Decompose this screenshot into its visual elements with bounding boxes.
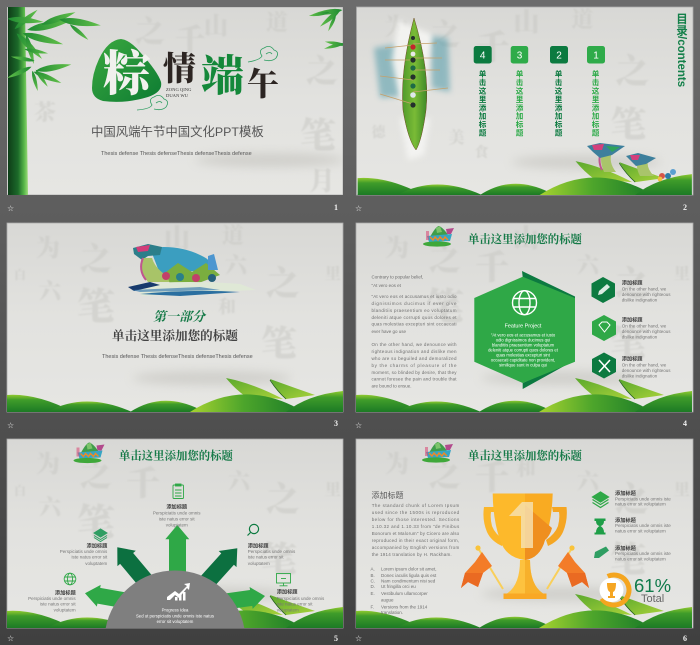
- slide 4 footer: ☆: [355, 421, 362, 430]
- slide 5 footer: 5: [334, 634, 338, 643]
- logo: 情端午 lettering: [163, 51, 279, 102]
- lettered list: [370, 566, 437, 615]
- text heading: 添加标题: [372, 490, 404, 500]
- contents item 3: 单击这里添加标题: [515, 69, 524, 137]
- slide 5: progress idea: 笔: [77, 492, 115, 547]
- slide 5: progress idea: 笔: [261, 532, 297, 583]
- left flag: [461, 545, 503, 589]
- slide 2: contents: 德: [372, 122, 388, 142]
- slide 5: progress idea: 为: [36, 444, 60, 479]
- slide 3: section title: 道: [222, 219, 244, 250]
- central semicircle: Progress Idea: [162, 608, 189, 612]
- intro text column: Contrary to popular belief,: [372, 274, 423, 280]
- slide 3: section title: 山: [164, 218, 190, 255]
- intro text column: "At vero eos et: [372, 283, 402, 288]
- slide 6 heading: 单击这里添加您的标题: [468, 448, 583, 462]
- info item: layers: natus error sit voluptatem: [615, 502, 666, 506]
- contents item 4: 4: [480, 50, 486, 62]
- paragraph: accompanied by English versions from: [372, 545, 459, 550]
- contents item 1: [587, 46, 605, 137]
- feature 2: denounce with righteous: [622, 329, 671, 334]
- slide 2: contents: 笔: [610, 97, 647, 148]
- section label: 第一部分: [153, 309, 207, 324]
- slide 3: section title: 为: [36, 228, 60, 263]
- icon: layers: [94, 529, 107, 542]
- slide 1: cover: [6, 6, 346, 198]
- intro text column: On the other hand, we denounce with: [372, 342, 457, 347]
- intro text column: by the charms of pleasure of the: [372, 363, 457, 368]
- feature 3: On the other hand, we: [622, 362, 667, 368]
- item: upper right: 添加标题: [248, 542, 269, 550]
- trophy: [483, 494, 567, 599]
- item: upper left: iste natus error sit: [72, 554, 108, 560]
- slide 3: section title: 笔: [261, 316, 297, 367]
- slide 2 footer: ☆: [355, 204, 362, 213]
- paragraph: [372, 503, 460, 557]
- slide 6: trophy: 里: [674, 477, 690, 500]
- slide 1: cover: 之: [135, 7, 165, 51]
- feature 1: 添加标题: [622, 278, 643, 286]
- logo: 情端午 lettering: 午: [247, 66, 279, 102]
- slide 2: contents: 道: [571, 3, 594, 34]
- central hexagon: [474, 271, 575, 389]
- slide 4 footer: [355, 419, 687, 430]
- central hexagon: "At vero eos et accusamus et iusto: [491, 332, 556, 338]
- lettered list: Lorem ipsum dolor sit amet,: [381, 566, 437, 572]
- slide 6: trophy: 笔: [610, 532, 646, 583]
- slide 4: feature project: 之: [615, 256, 649, 305]
- contents item 4: 单击这里添加标题: [478, 69, 487, 137]
- bottom leaves: [7, 378, 343, 412]
- slide 6: trophy: 为: [385, 444, 409, 479]
- slide 1 footer: 1: [334, 203, 338, 212]
- arrow: upper right: [198, 540, 246, 591]
- right flag: [547, 545, 589, 589]
- intro text column: are bound to ensue.: [372, 384, 412, 388]
- icon: monitor: [276, 574, 290, 586]
- bamboo leaves left: [6, 8, 101, 91]
- slide 2 footer: [355, 203, 687, 213]
- bottom leaves: [356, 594, 692, 628]
- slide 3: section title: [7, 218, 343, 412]
- feature 3: 添加标题: [622, 354, 643, 362]
- slide 3 footer: [7, 419, 338, 430]
- subtitle: Thesis defense Thesis defenseThesis defenseThesis defense: [101, 151, 252, 157]
- central hexagon: Feature Project: [505, 324, 542, 330]
- item: top: voluptatem: [166, 522, 188, 528]
- icon: globe: [64, 573, 76, 585]
- item: top: [153, 484, 201, 528]
- info item: pencil: [594, 544, 671, 562]
- total label: Total: [641, 593, 664, 605]
- logo badge: 粽: [92, 39, 161, 102]
- icon: layers: [592, 492, 608, 508]
- slide 5: progress idea: 六: [228, 465, 253, 496]
- slide 1 footer: [7, 203, 338, 213]
- icon: small trophy: [607, 583, 616, 598]
- slide 4: feature project: 之: [429, 234, 461, 280]
- item: right: iste natus error sit: [277, 602, 313, 606]
- info item: layers: [592, 489, 671, 508]
- lettered list: augue: [381, 598, 394, 602]
- item: upper left: 添加标题: [87, 542, 108, 550]
- lettered list: B.: [370, 573, 375, 578]
- slide 5: progress idea: 白: [14, 482, 26, 499]
- contents item 1: 1: [593, 50, 599, 62]
- item: upper right: voluptatem: [248, 561, 270, 566]
- feature 3: denounce with righteous: [622, 368, 671, 373]
- icon: diamond: [599, 322, 610, 332]
- intro text column: who are so beguiled and demoralized: [372, 356, 457, 361]
- slide 3: section title: 笔: [77, 276, 115, 331]
- header logo: [423, 226, 454, 247]
- slide 6: trophy: 六: [577, 465, 602, 496]
- arrow: right: [222, 585, 267, 613]
- info item: pencil: 添加标题: [615, 544, 637, 552]
- slide 2: contents: 美: [448, 125, 465, 148]
- logo: 情端午 lettering: DUAN WU: [166, 93, 189, 98]
- slide 3 footer: 3: [334, 419, 338, 428]
- slide 4: feature project: 笔: [426, 276, 464, 331]
- slide 6: trophy: 和: [516, 452, 536, 481]
- arrow: left: [83, 582, 128, 611]
- arrow: upper left: [108, 540, 156, 590]
- intro text column: cannot foresee the pain and trouble that: [372, 376, 457, 382]
- slide 5: progress idea: 之: [80, 450, 112, 496]
- contents item 1: 单击这里添加标题: [591, 69, 600, 137]
- header logo: [74, 442, 104, 463]
- contents item 3: 3: [517, 50, 523, 62]
- contents item 4: [474, 46, 492, 137]
- lettered list: Versions from the 1914: [381, 604, 428, 610]
- paragraph: The standard chunk of Lorem Ipsum: [372, 503, 459, 508]
- item: top: iste natus error sit: [159, 516, 195, 522]
- item: top: 添加标题: [166, 502, 188, 510]
- slide 1: cover: 茶: [34, 96, 56, 127]
- info item: hourglass: Perspiciatis unde omnis iste: [615, 523, 671, 528]
- feature 1: dislike indignation: [622, 298, 658, 302]
- intro text column: dignissimos ducimus if ever give: [372, 301, 457, 306]
- section title: 单击这里添加您的标题: [112, 328, 238, 343]
- paragraph: 1.10.32 and 1.10.33 from "de Finibus: [372, 524, 460, 529]
- donut chart: 61%: [594, 570, 634, 610]
- bamboo stem: [8, 7, 28, 195]
- lettered list: D.: [370, 584, 375, 589]
- slide 5: progress idea: 之: [266, 472, 300, 521]
- slide 6 footer: 6: [683, 634, 687, 643]
- info item: hourglass: 添加标题: [615, 516, 637, 524]
- item: right: 添加标题: [277, 588, 298, 596]
- icon: wrench: [248, 524, 259, 536]
- intro text column: moment, so blinded by desire, that they: [372, 370, 457, 375]
- slide 2: contents: 山: [513, 2, 540, 39]
- dragon heads: [587, 143, 676, 181]
- percent label: 61%: [634, 575, 671, 596]
- slide 3: section title: 白: [14, 266, 26, 283]
- slide 4: feature project: [356, 218, 693, 412]
- feature 1: [592, 277, 671, 303]
- slide 3: section title: 之: [80, 234, 112, 280]
- central hexagon: odio dignissimos ducimus qui: [496, 338, 550, 342]
- slide 5: progress idea: 六: [39, 491, 64, 522]
- slide 4 footer: 4: [683, 419, 687, 428]
- slide 1: cover: 道: [266, 6, 288, 37]
- section subtitle: Thesis defense Thesis defenseThesis defenseThesis defense: [102, 354, 253, 360]
- slide 4: feature project: 六: [577, 249, 602, 280]
- paragraph: Bonorum et Malorum" by Cicero are also: [372, 531, 460, 536]
- logo: 情端午 lettering: 端: [201, 53, 244, 101]
- slide 3: section title: 和: [218, 293, 236, 319]
- logo badge: 粽: 粽: [103, 48, 154, 101]
- contents item 2: [550, 46, 568, 137]
- item: upper right: Perspiciatis unde omnis: [248, 549, 296, 554]
- lettered list: F.: [370, 604, 374, 610]
- paragraph: reproduced in their exact original form,: [372, 538, 459, 543]
- slide 3: section title: 里: [325, 261, 341, 284]
- arrow: top: [165, 525, 189, 575]
- feature 2: [592, 315, 671, 341]
- central hexagon: blanditiis praesentium voluptatum: [492, 343, 555, 348]
- slide 6 footer: [355, 634, 687, 643]
- slide 4: feature project: 山: [513, 218, 539, 255]
- item: upper right: iste natus error sit: [248, 554, 284, 560]
- paragraph: below for those interested. Sections: [372, 517, 460, 522]
- feature 2: On the other hand, we: [622, 324, 667, 328]
- slide 2: contents: 之: [616, 44, 650, 93]
- slide 3 footer: ☆: [7, 421, 14, 430]
- lettered list: Vestibulum ullamcorper: [381, 591, 428, 596]
- icon: hourglass: [594, 518, 606, 534]
- lettered list: A.: [370, 566, 375, 572]
- icon: pencil: [598, 284, 610, 295]
- logo: 情端午 lettering: 情: [163, 51, 196, 88]
- info item: pencil: Perspiciatis unde omnis iste: [615, 551, 671, 556]
- info item: layers: Perspiciatis unde omnis iste: [615, 496, 671, 502]
- contents item 3: [511, 46, 528, 137]
- item: left: Perspiciatis unde omnis: [28, 596, 76, 601]
- slide 5 footer: ☆: [7, 634, 14, 643]
- lettered list: Donec iaculis ligula quis est: [381, 573, 437, 578]
- slide 3: section title: 六: [39, 275, 64, 306]
- icon: tools: [599, 360, 610, 372]
- slide 2: contents: 千: [476, 20, 510, 69]
- central semicircle: [106, 570, 244, 628]
- slide 1: cover: 之: [306, 46, 338, 92]
- slide 3: section title: 六: [225, 249, 250, 280]
- lettered list: C.: [370, 578, 375, 584]
- item: upper right: [248, 524, 296, 566]
- intro text column: righteous indignation and dislike men: [372, 349, 457, 354]
- slide 3: section title: 之: [266, 256, 300, 305]
- contents heading: 目录/contents: [675, 13, 688, 87]
- item: left: voluptatem: [54, 608, 76, 612]
- bamboo leaves right: [309, 8, 343, 49]
- slide 5: progress idea: 里: [325, 477, 341, 500]
- item: upper left: Perspiciatis unde omnis: [60, 549, 108, 554]
- slide 4: feature project: 千: [475, 240, 509, 289]
- slide 4: feature project: 笔: [610, 316, 646, 367]
- contents item 2: 2: [556, 50, 562, 62]
- slide 2 footer: 2: [683, 203, 687, 212]
- slide 4: feature project: 为: [385, 228, 409, 263]
- item: top: Perspiciatis unde omnis: [153, 510, 201, 516]
- central hexagon: occaecati cupiditate non provident,: [491, 358, 555, 363]
- central hexagon: deleniti atque corrupti quos dolores et: [488, 348, 559, 352]
- item: left: 添加标题: [55, 588, 76, 596]
- title: 中国风端午节中国文化PPT模板: [91, 124, 264, 139]
- feature 2: dislike indignation: [622, 334, 658, 340]
- number 1: [509, 502, 533, 548]
- lettered list: translation.: [381, 610, 403, 615]
- central semicircle: error sit voluptatem: [157, 619, 194, 624]
- slide 2: contents: [356, 2, 693, 195]
- slide 6: trophy: 千: [475, 450, 509, 499]
- slide 4 heading: 单击这里添加您的标题: [468, 232, 583, 246]
- item: right: [276, 574, 325, 612]
- intro text column: ever have go use: [372, 329, 407, 334]
- slide 1 footer: ☆: [7, 204, 14, 213]
- slide 2: contents: 为: [384, 7, 408, 42]
- logo: 情端午 lettering: ZONG QING: [166, 87, 192, 92]
- lettered list: E.: [370, 591, 375, 596]
- contents item 2: 单击这里添加标题: [554, 69, 563, 137]
- feature 3: [592, 352, 671, 378]
- intro text column: blanditiis praesentium eo voluptatum: [372, 308, 457, 313]
- lettered list: Nam condimentum nisi sed: [381, 578, 436, 584]
- info item: layers: 添加标题: [615, 489, 637, 497]
- slide 1: cover: 山: [204, 6, 228, 41]
- slide 6 footer: ☆: [355, 634, 362, 643]
- slide 1: cover: 千: [175, 15, 205, 59]
- slide 1: cover: 月: [309, 161, 335, 198]
- dragon boat top view: [374, 18, 450, 160]
- bottom leaves: [356, 378, 692, 412]
- slide 6: trophy: [356, 439, 693, 628]
- feature 1: On the other hand, we: [622, 286, 667, 292]
- intro text column: deleniti atque corrupti quos dolores et: [372, 315, 457, 320]
- icon: globe: [512, 291, 536, 315]
- slide 2: contents: 之: [430, 10, 460, 54]
- slide 4: feature project: 里: [674, 261, 690, 284]
- item: right: Perspiciatis unde omnis: [277, 596, 325, 601]
- dragon boat illustration: [128, 244, 256, 296]
- slide 5: progress idea: [7, 439, 343, 628]
- info item: hourglass: natus error sit voluptatem: [615, 528, 666, 534]
- item: left: [28, 573, 76, 612]
- slide 5 heading: 单击这里添加您的标题: [119, 448, 234, 462]
- item: upper left: voluptatem: [85, 561, 108, 566]
- intro text column: [372, 274, 457, 388]
- slide 5 footer: [7, 634, 338, 643]
- slide 6: trophy: 之: [615, 472, 649, 521]
- slide 6: trophy: 之: [429, 450, 461, 496]
- paragraph: used since the 1500s is reproduced: [372, 510, 460, 515]
- feature 3: dislike indignation: [622, 374, 658, 378]
- slide 2: contents: 食: [474, 142, 488, 162]
- central hexagon: quas molestias excepturi sint: [496, 352, 551, 358]
- cloud ornaments: [137, 46, 278, 110]
- intro text column: "At vero eos et accusamus et iusto odio: [372, 294, 457, 299]
- bottom leaves: [7, 594, 343, 628]
- intro text column: quas molestias excepturi sint occaecati: [372, 322, 456, 326]
- header logo: [422, 442, 453, 463]
- feature 1: denounce with righteous: [622, 292, 671, 297]
- icon: growth chart: [167, 583, 190, 600]
- icon: clipboard: [173, 484, 184, 498]
- item: left: iste natus error sit: [40, 602, 76, 606]
- bottom leaves: [358, 161, 692, 195]
- slide 1: cover: 笔: [300, 108, 336, 159]
- central semicircle: Sed ut perspiciatis unde omnis iste natus: [136, 614, 214, 618]
- feature 2: 添加标题: [622, 316, 643, 324]
- info item: hourglass: [594, 516, 671, 534]
- item: right: voluptatem: [277, 608, 299, 612]
- paragraph: the 1914 translation by H. Rackham.: [372, 552, 452, 557]
- icon: pencil: [594, 546, 609, 558]
- info item: pencil: natus error sit voluptatem: [615, 556, 666, 562]
- item: upper left: [60, 529, 108, 566]
- lettered list: Ut fringilla orci eu: [381, 584, 416, 589]
- slide 5: progress idea: 千: [126, 456, 160, 505]
- central hexagon: similique sunt in culpa qui: [499, 363, 547, 368]
